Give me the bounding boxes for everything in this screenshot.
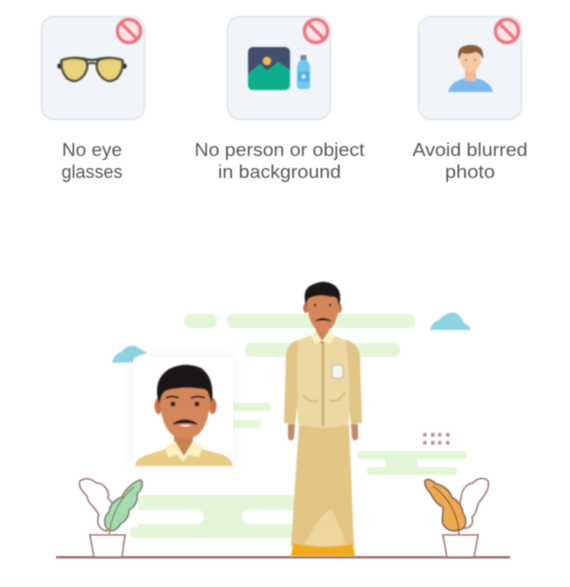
portrait photo card (133, 357, 233, 467)
orange leaf (425, 480, 466, 531)
cloud: left (112, 346, 147, 363)
icon: prohibited (496, 20, 518, 42)
label: avoid blurred photo: Avoid blurred (412, 140, 528, 160)
icon: prohibited (304, 20, 328, 42)
plant: right (425, 479, 488, 557)
card: glasses (42, 16, 144, 120)
card: blurred photo (418, 16, 522, 120)
label: no eye glasses: No eye (62, 140, 122, 160)
ground line (56, 556, 510, 558)
panel: avoid blurred photo (412, 16, 528, 182)
panel: no person or object in background (194, 16, 364, 182)
right sleeve (346, 340, 362, 424)
plant: left (79, 479, 142, 557)
panel: no eye glasses (42, 16, 144, 182)
lungi border (291, 543, 355, 556)
placket (322, 340, 324, 426)
lungi (291, 425, 354, 546)
pot (443, 535, 478, 557)
label: no person or object (194, 140, 364, 182)
icon: prohibited (118, 20, 140, 42)
label: no person or object: in background (218, 162, 341, 182)
standing man (284, 282, 362, 556)
white leaf (79, 479, 114, 531)
label: avoid blurred photo (412, 140, 528, 182)
hands (288, 424, 295, 440)
dots grid (423, 433, 450, 444)
left sleeve (284, 340, 300, 424)
label: no eye glasses: glasses (62, 162, 122, 182)
background white bars (125, 510, 298, 524)
badge (332, 365, 343, 378)
neck and collar (316, 325, 329, 344)
icon: blurred person (448, 45, 493, 92)
icon: water bottle (297, 55, 310, 89)
white leaf (460, 479, 488, 528)
label: no eye glasses (62, 140, 122, 182)
icon: sunglasses (57, 58, 127, 81)
cloud: right (430, 313, 471, 330)
head (303, 303, 309, 313)
shirt (297, 335, 349, 428)
portrait man (135, 365, 233, 466)
pot (90, 535, 125, 557)
icon: landscape picture (248, 47, 290, 90)
label: avoid blurred photo: photo (445, 162, 495, 182)
label: no person or object: No person or object (194, 140, 364, 160)
card: background (228, 16, 330, 120)
illustration: background shapes (130, 314, 467, 538)
green leaf (105, 480, 142, 531)
